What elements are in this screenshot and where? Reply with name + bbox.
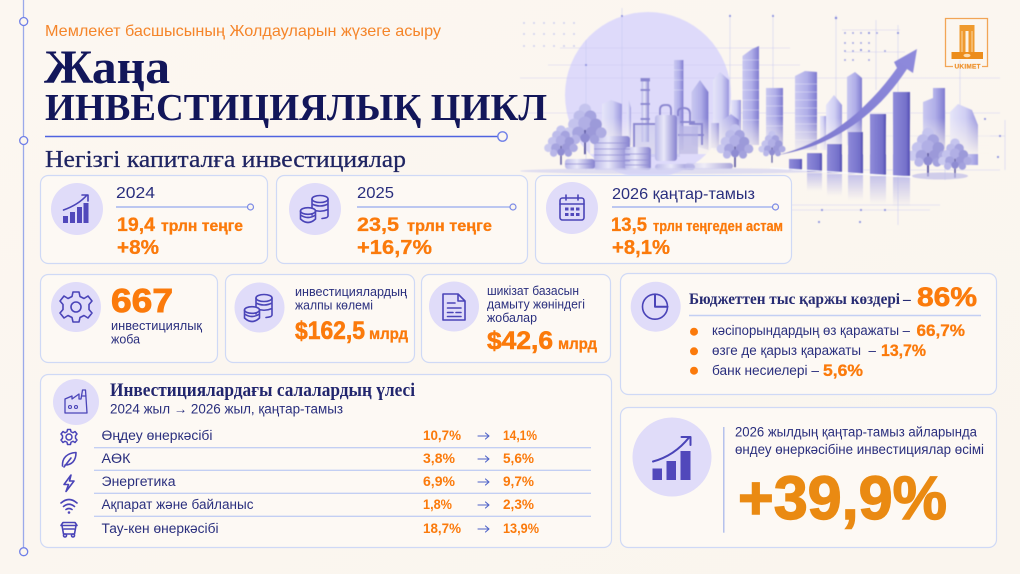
row: communications: 1,8% (423, 497, 452, 512)
icon: factory (53, 379, 99, 425)
panel: total investment: млрд (369, 326, 408, 343)
panel: manufacturing growth (620, 408, 996, 548)
row: manufacturing: 14,1% (503, 428, 537, 443)
icon: rising bars (51, 183, 103, 235)
row: mining: 18,7% (423, 521, 461, 536)
ground (520, 168, 820, 174)
panel: 2024: трлн теңге (161, 218, 243, 235)
section heading: Негізгі капиталға инвестициялар (45, 146, 406, 173)
panel: 2026: 13,5 (611, 215, 647, 236)
panel: 2025: +16,7% (357, 237, 432, 259)
trees (544, 104, 972, 180)
row: manufacturing (61, 428, 537, 444)
panel: off-budget sources: 66,7% (916, 322, 965, 340)
panel: off-budget sources: кәсіпорындардың өз қаражаты – (712, 323, 910, 338)
panel: total investment (226, 274, 414, 362)
panel: 2026: +8,1% (612, 237, 670, 259)
row: communications: Ақпарат және байланыс (102, 497, 254, 512)
panel: 2026: 2026 қаңтар-тамыз (612, 186, 755, 203)
panel: 2026: трлн теңгеден астам (653, 218, 783, 235)
row: mining: 13,9% (503, 521, 539, 536)
illustration: city, industry and growth chart (520, 8, 1005, 225)
row: agriculture: 3,8% (423, 451, 455, 466)
panel: raw material projects (422, 274, 610, 362)
row: energy: 6,9% (423, 474, 455, 489)
row: energy: 9,7% (503, 474, 534, 489)
row: communications: 2,3% (503, 497, 534, 512)
row: communications (61, 497, 534, 514)
kicker text: Мемлекет басшысының Жолдауларын жүзеге асыру (45, 23, 441, 40)
panel: 2024: 19,4 (117, 215, 155, 236)
title underline (45, 132, 507, 141)
panel: sector shares: Инвестициялардағы салалардың үлесі (110, 380, 415, 401)
panel: total investment: $162,5 (295, 317, 365, 345)
growth arrow (778, 49, 917, 155)
logo: UKIMET (946, 18, 988, 70)
panel: raw material projects: шикізат базасын (487, 283, 579, 298)
panel: total investment: инвестициялардың (295, 284, 408, 299)
panel: 2026 (536, 176, 792, 264)
panel: 2024: 2024 (116, 185, 155, 202)
bars (770, 92, 912, 207)
row: agriculture: АӨК (102, 451, 131, 466)
row: energy: Энергетика (102, 474, 176, 489)
panel: off-budget sources: 86% (917, 282, 977, 312)
panel: 2024 (40, 176, 268, 264)
panel: 667 projects (40, 274, 218, 362)
row: energy (64, 474, 534, 492)
row: mining: Тау-кен өнеркәсібі (102, 521, 218, 536)
row: agriculture (62, 451, 534, 467)
panel: manufacturing growth: +39,9% (738, 464, 947, 532)
row: mining (61, 521, 539, 537)
panel: raw material projects: $42,6 (487, 327, 553, 355)
title (44, 41, 547, 129)
panel: 2025: 2025 (357, 185, 394, 202)
panel: off-budget sources: өзге де қарыз қаражаты – (712, 343, 876, 358)
panel: sector shares (40, 374, 612, 548)
panel: manufacturing growth: өндеу өнеркәсібіне инвестициялар өсімі (735, 442, 984, 457)
panel: off-budget sources: банк несиелері – (712, 363, 819, 378)
icon: calendar (546, 182, 598, 234)
panel: total investment: жалпы көлемі (295, 298, 373, 312)
panel: raw material projects: дамыту жөніндегі (487, 296, 585, 312)
panel: sector shares: 2024 жыл → 2026 жыл, қаңтар-тамыз (110, 402, 343, 416)
panel: off-budget sources: – (902, 291, 911, 308)
refinery (634, 78, 704, 161)
panel: manufacturing growth: 2026 жылдың қаңтар-тамыз айларында (735, 425, 977, 440)
panel: off-budget sources: Бюджеттен тыс қаржы көздері (689, 291, 901, 308)
icon: coins (289, 183, 341, 235)
panel: 667 projects: 667 (111, 282, 173, 319)
panel: 667 projects: жоба (111, 332, 141, 346)
icon: coins (234, 282, 284, 332)
row: agriculture: 5,6% (503, 451, 534, 466)
panel: raw material projects: млрд (558, 336, 597, 353)
skyline (602, 46, 978, 165)
title: ИНВЕСТИЦИЯЛЫҚ ЦИКЛ (45, 87, 547, 129)
title: Жаңа (44, 41, 170, 94)
panel: 2025: 23,5 (357, 215, 399, 236)
panel: off-budget sources: 13,7% (881, 342, 926, 360)
panel: off-budget sources (620, 274, 996, 394)
row: manufacturing: Өңдеу өнеркәсібі (102, 428, 212, 443)
icon: pie chart (631, 282, 681, 332)
row: manufacturing: 10,7% (423, 428, 461, 443)
icon: document (429, 282, 479, 332)
icon: gear (51, 282, 101, 332)
panel: off-budget sources: 5,6% (823, 362, 863, 380)
logo: UKIMET: UKIMET (954, 64, 981, 70)
panel: 667 projects: инвестициялық (111, 318, 202, 333)
coin stacks (565, 136, 733, 170)
timeline rail (20, 0, 28, 556)
panel: 2024: +8% (117, 237, 159, 259)
panel: raw material projects: жобалар (487, 310, 537, 325)
icon: growth chart (632, 418, 712, 496)
panel: 2025 (276, 176, 528, 264)
panel: 2025: трлн теңге (407, 218, 492, 235)
